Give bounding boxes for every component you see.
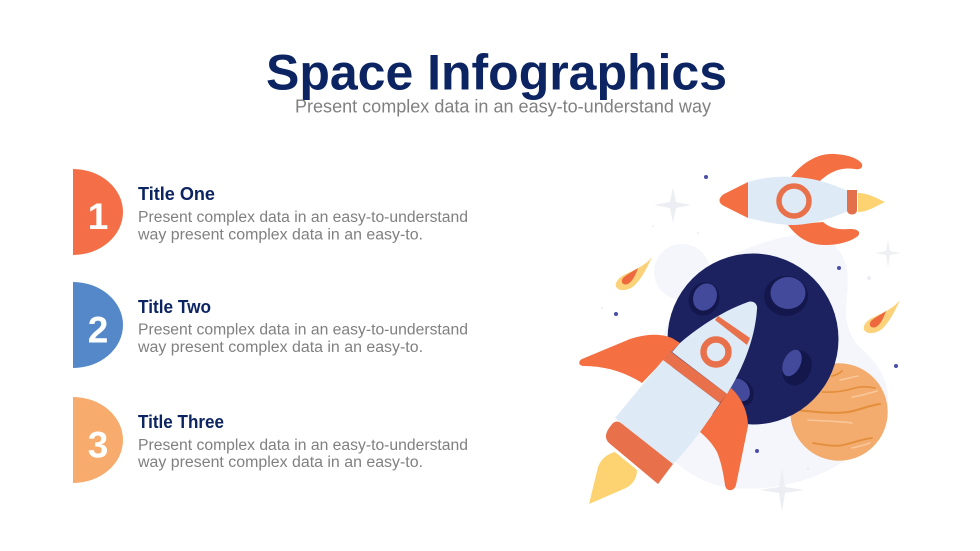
item 2 text: Present complex data in an easy-to-understand — [138, 322, 468, 338]
fins — [791, 154, 862, 181]
item 3 text — [137, 437, 468, 471]
item 1 text: way present complex data in an easy-to. — [137, 226, 423, 244]
flame — [589, 452, 637, 504]
item 2 — [73, 282, 468, 368]
nose band — [715, 316, 750, 345]
star left — [654, 187, 691, 223]
item 2 text — [137, 322, 468, 356]
star bottom — [760, 468, 804, 512]
item 2 text: way present complex data in an easy-to. — [137, 339, 423, 356]
title: Space Infographics — [266, 44, 727, 100]
badge 2 — [73, 282, 123, 368]
planet stripes — [797, 371, 880, 448]
right fin — [700, 388, 748, 490]
subtitle: Present complex data in an easy-to-understand way — [295, 96, 711, 116]
background blob — [648, 235, 888, 489]
badge 1 — [73, 169, 123, 255]
window — [704, 340, 728, 364]
large rocket — [579, 301, 757, 504]
item 1 — [73, 169, 468, 255]
left fin — [579, 335, 680, 383]
nose — [720, 182, 748, 218]
item 1 text: Present complex data in an easy-to-understand — [138, 209, 468, 226]
space illustration — [579, 154, 901, 512]
orange planet — [790, 363, 888, 461]
item 3 text: way present complex data in an easy-to. — [137, 454, 423, 471]
badge 3: 3 — [88, 424, 108, 466]
item 1 text — [137, 209, 468, 244]
body — [748, 177, 848, 225]
lower body — [615, 360, 720, 464]
dots — [614, 175, 898, 453]
waist band — [663, 351, 727, 403]
badge 2: 2 — [88, 310, 108, 350]
item 1 heading: Title One — [138, 183, 215, 204]
faint dots — [601, 225, 871, 470]
upper body — [672, 301, 757, 394]
item 3 text: Present complex data in an easy-to-understand — [138, 437, 468, 454]
item 2 heading: Title Two — [138, 296, 211, 317]
window — [779, 186, 809, 216]
item 3 heading: Title Three — [138, 411, 224, 432]
star right — [875, 240, 901, 267]
meteor left — [616, 257, 652, 290]
nozzle — [847, 190, 857, 214]
badge 1: 1 — [88, 196, 108, 237]
small rocket — [720, 154, 885, 245]
meteor right — [864, 300, 900, 333]
badge 3 — [73, 397, 123, 483]
flame — [858, 193, 885, 212]
nozzle — [606, 422, 673, 484]
craters — [683, 276, 817, 410]
item 3 — [73, 397, 468, 483]
dark planet — [668, 254, 838, 424]
